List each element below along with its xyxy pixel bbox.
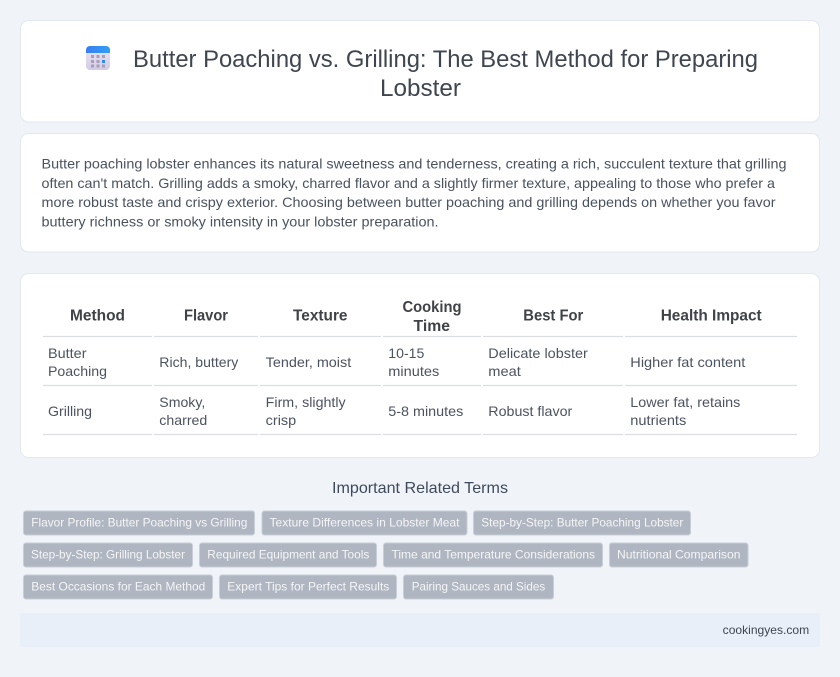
table row: butter poaching: minutes <box>388 363 439 379</box>
table row: butter poaching: Delicate lobster <box>488 345 588 361</box>
text block: introduction: often can't match. Grilling adds a smoky, charred flavor and a slightly firmer texture, appealing to those who prefer a <box>42 175 775 191</box>
table row: grilling: Robust flavor <box>488 403 573 419</box>
table header row: Flavor <box>184 308 228 325</box>
tag: grilling steps: Step-by-Step: Grilling Lobster <box>31 548 185 562</box>
table row: butter poaching: Poaching <box>48 363 107 379</box>
table header row: Texture <box>293 308 348 325</box>
tag: expert tips: Expert Tips for Perfect Results <box>227 580 389 594</box>
related terms tags <box>24 511 748 599</box>
table header row: Method <box>70 308 125 325</box>
tag: butter poaching steps: Step-by-Step: Butter Poaching Lobster <box>481 516 683 530</box>
tag: time and temperature: Time and Temperature Considerations <box>392 548 595 562</box>
tag: texture differences <box>262 511 467 535</box>
table header row: Time <box>414 318 450 335</box>
table header row: Cooking <box>402 299 462 316</box>
heading: important related terms: Important Related Terms <box>332 480 508 497</box>
table row: grilling: nutrients <box>630 412 686 428</box>
text block: introduction: more robust taste and crispy exterior. Choosing between butter poaching and grilling depends on whether you favor <box>42 194 776 210</box>
table row: grilling: Grilling <box>48 403 92 419</box>
table row: butter poaching: Higher fat content <box>630 354 745 370</box>
table row: grilling: charred <box>159 412 207 428</box>
table row: butter poaching <box>48 345 745 379</box>
table row: butter poaching: Butter <box>48 345 87 361</box>
icon: calendar <box>86 46 110 70</box>
table header row: Health Impact <box>661 308 762 325</box>
tag: flavor profile <box>24 511 254 535</box>
table row: grilling: Firm, slightly <box>266 394 346 410</box>
title: Lobster <box>380 75 461 102</box>
tag: pairing sauces <box>404 575 554 599</box>
tag: equipment <box>200 543 376 567</box>
tag: best occasions <box>24 575 212 599</box>
tag: pairing sauces: Pairing Sauces and Sides <box>412 580 545 594</box>
table row: butter poaching: Rich, buttery <box>159 354 238 370</box>
table row: grilling: crisp <box>266 412 296 428</box>
tag: expert tips <box>220 575 396 599</box>
footer <box>20 613 820 647</box>
title: Butter Poaching vs. Grilling: The Best Method for Preparing <box>133 46 758 73</box>
table row: grilling: Smoky, <box>159 394 205 410</box>
table header row: Best For <box>523 308 583 325</box>
table row: butter poaching: meat <box>488 363 521 379</box>
tag: time and temperature <box>384 543 602 567</box>
footer: cookingyes.com <box>723 623 809 637</box>
tag: equipment: Required Equipment and Tools <box>207 548 369 562</box>
text block: introduction: Butter poaching lobster enhances its natural sweetness and tenderness, creating a rich, succulent texture that grilling <box>42 156 786 172</box>
text block: introduction <box>42 156 786 229</box>
table row: butter poaching: 10-15 <box>388 345 425 361</box>
panel: header <box>20 20 820 122</box>
table row: grilling <box>48 394 740 428</box>
table row: grilling: Lower fat, retains <box>630 394 740 410</box>
table header row <box>70 299 762 335</box>
tag: butter poaching steps <box>474 511 690 535</box>
panel: introduction paragraph <box>20 134 820 252</box>
tag: texture differences: Texture Differences in Lobster Meat <box>270 516 460 530</box>
table row: butter poaching: Tender, moist <box>266 354 351 370</box>
tag: grilling steps <box>24 543 192 567</box>
tag: flavor profile: Flavor Profile: Butter Poaching vs Grilling <box>31 516 247 530</box>
table row: grilling: 5-8 minutes <box>388 403 463 419</box>
text block: introduction: buttery richness or smoky intensity in your lobster preparation. <box>42 213 438 229</box>
tag: nutritional comparison <box>610 543 748 567</box>
panel: comparison table <box>20 274 820 458</box>
tag: nutritional comparison: Nutritional Comparison <box>617 548 740 562</box>
title <box>133 46 758 102</box>
tag: best occasions: Best Occasions for Each Method <box>31 580 205 594</box>
